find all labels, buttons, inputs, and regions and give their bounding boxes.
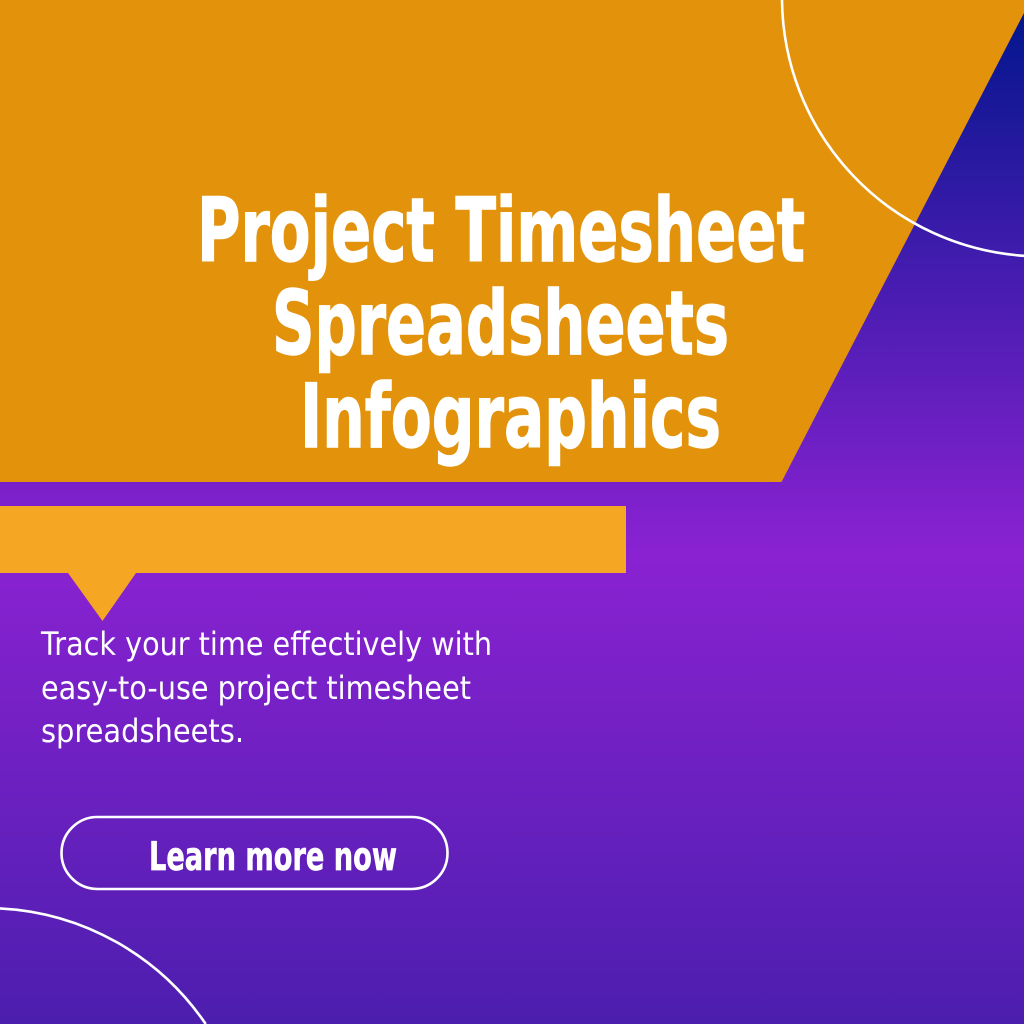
button: learn more now: Learn more now bbox=[149, 835, 397, 880]
text block: description bbox=[40, 625, 492, 750]
text block: description: Track your time effectively with bbox=[40, 625, 492, 663]
decorative arc: bottom left bbox=[0, 908, 206, 1024]
title: Spreadsheets bbox=[272, 272, 729, 375]
title: Infographics bbox=[300, 365, 721, 468]
text block: description: spreadsheets. bbox=[41, 712, 244, 750]
panel: orange header shape bbox=[0, 0, 1024, 482]
title bbox=[197, 179, 805, 468]
callout: orange speech bar bbox=[0, 506, 626, 621]
button: learn more now bbox=[62, 817, 448, 889]
decorative arc: top right bbox=[782, 0, 1024, 256]
text block: description: easy-to-use project timesheet bbox=[41, 669, 471, 707]
